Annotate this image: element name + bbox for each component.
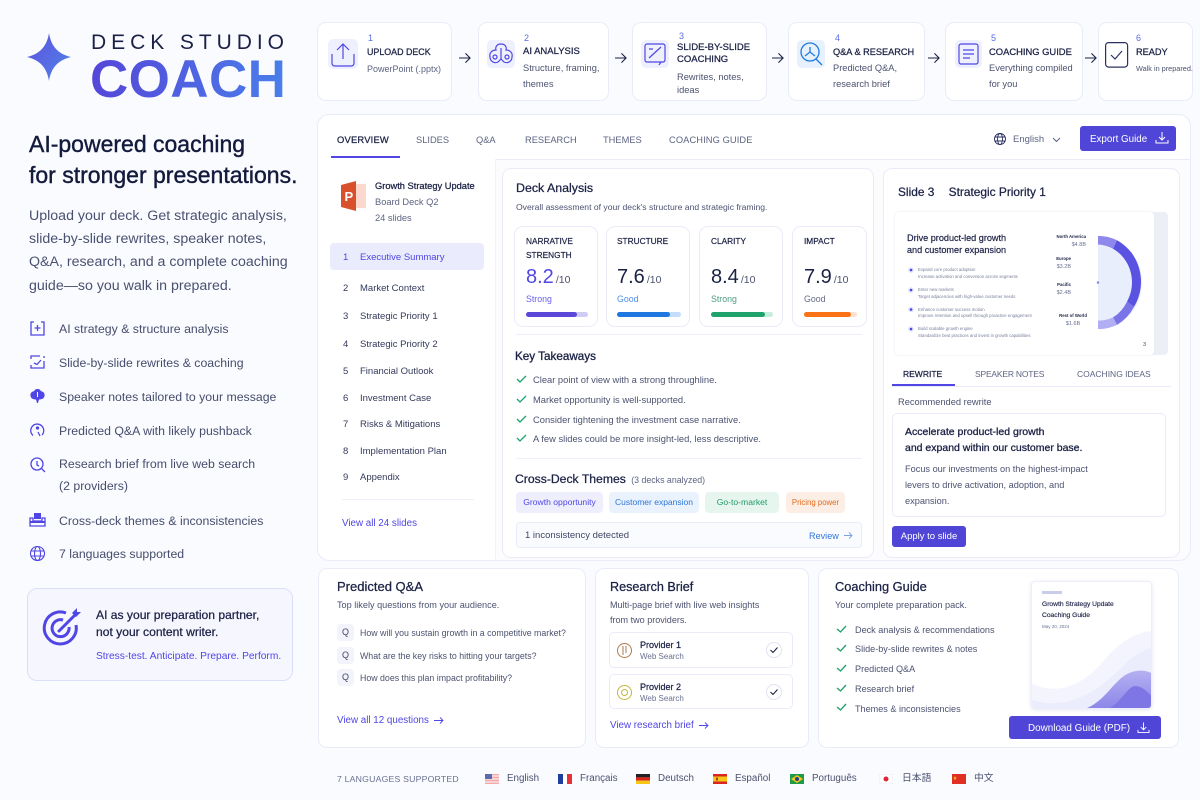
provider 1: Web Search xyxy=(640,652,684,661)
step 3: slide-by-slide coaching: COACHING xyxy=(677,54,728,65)
button: apply to slide xyxy=(892,526,966,547)
step 5: coaching guide: for you xyxy=(989,78,1017,88)
inconsistency notice xyxy=(516,522,862,548)
wordmark coach: COACH xyxy=(90,50,286,109)
slide bullets: Enhance customer success motion xyxy=(918,306,985,312)
panel: main app window xyxy=(317,114,1191,561)
tab labels: SLIDES xyxy=(416,135,449,145)
slide bullets: Enter new markets xyxy=(918,287,954,292)
language: english: English xyxy=(507,773,539,784)
metric: narrative strength: STRENGTH xyxy=(526,250,572,260)
feature list xyxy=(29,321,276,561)
takeaways list: Consider tightening the investment case narrative. xyxy=(533,415,741,425)
language: spanish xyxy=(713,771,778,789)
takeaways list: Clear point of view with a strong throughline. xyxy=(533,375,717,385)
metric: impact xyxy=(792,226,867,327)
icon: research search xyxy=(30,457,46,472)
deck meta: 24 slides xyxy=(375,212,412,222)
provider 2: Provider 2 xyxy=(640,682,681,692)
step 5: coaching guide: Everything compiled xyxy=(989,63,1073,73)
callout: preparation partner xyxy=(27,588,293,681)
chart labels: Rest of World xyxy=(1059,313,1087,318)
icon: magnifier xyxy=(797,40,825,68)
step 3: slide-by-slide coaching xyxy=(632,22,767,101)
footer: languages xyxy=(337,771,1007,789)
step 4: q&a and research: research brief xyxy=(833,78,890,88)
icon: globe xyxy=(30,546,46,561)
subheading: from two providers. xyxy=(610,615,687,625)
step 1: upload deck xyxy=(317,22,452,101)
feature text: (2 providers) xyxy=(59,479,128,493)
callout heading: AI as your preparation partner, xyxy=(96,608,259,622)
icon: speaker notes xyxy=(30,389,45,403)
tab labels: COACHING GUIDE xyxy=(669,135,753,145)
slide list: 9 xyxy=(343,472,348,483)
takeaways list xyxy=(516,375,761,444)
language: german: Deutsch xyxy=(658,773,694,784)
slide list: 8 xyxy=(343,446,348,457)
step 2: ai analysis: 2 xyxy=(524,33,529,43)
tab labels: THEMES xyxy=(603,135,642,145)
feature text: AI strategy & structure analysis xyxy=(59,322,228,336)
guide cover thumbnail: May 20, 2024 xyxy=(1042,624,1069,629)
metric: clarity: Strong xyxy=(711,294,737,304)
slide list: 2 xyxy=(343,283,348,294)
language: german xyxy=(636,771,701,789)
chart labels xyxy=(1056,234,1087,327)
heading: key takeaways: Key Takeaways xyxy=(515,350,596,363)
heading: Coaching Guide xyxy=(835,579,927,594)
slide title: Drive product-led growth xyxy=(907,233,1006,243)
checklist: Deck analysis & recommendations xyxy=(855,625,994,635)
arrow xyxy=(928,53,940,63)
step 4: q&a and research xyxy=(788,22,925,101)
metric: structure: Good xyxy=(617,294,639,304)
step 1: upload deck: 1 xyxy=(368,33,373,43)
step 5: coaching guide: COACHING GUIDE xyxy=(989,46,1072,57)
language: chinese: 中文 xyxy=(974,773,994,784)
deck meta xyxy=(375,197,439,222)
metric: structure: 7.6/10 xyxy=(617,266,661,288)
language: japanese xyxy=(879,771,934,789)
panel: slide detail xyxy=(883,168,1180,558)
chart: regional semicircle xyxy=(1096,236,1142,330)
metric: impact: IMPACT xyxy=(804,236,835,246)
link: view research brief: View research brief xyxy=(610,720,694,731)
question list: How does this plan impact profitability? xyxy=(360,673,512,683)
metric: narrative strength: Strong xyxy=(526,294,552,304)
theme chips: Growth opportunity xyxy=(523,497,596,507)
question list: How will you sustain growth in a competitive market? xyxy=(360,628,566,638)
slide list: 4 xyxy=(343,339,348,350)
checklist: Research brief xyxy=(855,684,914,694)
rewrite box: levers to drive activation, adoption, and xyxy=(905,480,1064,490)
icon: powerpoint file xyxy=(341,181,366,211)
icon: slide edit xyxy=(641,40,669,68)
language selector xyxy=(994,133,1060,145)
metric: narrative strength xyxy=(514,226,598,327)
heading: tagline: AI-powered coaching xyxy=(29,131,245,157)
tab labels: RESEARCH xyxy=(525,135,577,145)
icon: predicted q&a xyxy=(30,423,44,436)
logo: deck studio coach xyxy=(27,31,289,109)
metric: clarity: CLARITY xyxy=(711,236,746,246)
tab bar xyxy=(318,115,1190,160)
deck title: Growth Strategy Update xyxy=(375,181,475,191)
inconsistency notice: Review xyxy=(809,531,839,541)
slide bullets: Standardize best practices and invest in growth capabilities xyxy=(918,332,1030,338)
rewrite box: Accelerate product-led growth xyxy=(905,426,1044,438)
chart labels: $3.2B xyxy=(1057,264,1071,270)
theme chips xyxy=(516,492,845,513)
slide list: Risks & Mitigations xyxy=(360,419,440,430)
metric: clarity xyxy=(699,226,783,327)
heading: cross-deck themes: Cross-Deck Themes (3 decks analyzed) xyxy=(515,472,705,486)
chart labels: Pacific xyxy=(1057,282,1071,287)
step 1: upload deck: UPLOAD DECK xyxy=(367,47,431,57)
slide bullets: Build scalable growth engine xyxy=(918,326,973,331)
step 4: q&a and research: Predicted Q&A, xyxy=(833,63,897,73)
heading: Predicted Q&A xyxy=(337,579,423,594)
button: export guide: Export Guide xyxy=(1090,134,1147,145)
slide bullets: Target adjacencies with high-value customer needs xyxy=(918,294,1015,298)
subheading xyxy=(610,598,759,628)
text block: intro xyxy=(29,208,288,294)
language: english xyxy=(485,771,545,789)
takeaways list: A few slides could be more insight-led, less descriptive. xyxy=(533,434,761,444)
step 3: slide-by-slide coaching: Rewrites, notes, xyxy=(677,72,744,82)
metric: impact: 7.9/10 xyxy=(804,266,848,288)
question list: What are the key risks to hitting your targets? xyxy=(360,651,537,661)
panel: coaching guide xyxy=(818,568,1179,748)
language: spanish: Español xyxy=(735,773,770,784)
icon: sparkle star xyxy=(27,33,71,81)
language: portuguese: Português xyxy=(812,773,857,784)
guide cover thumbnail xyxy=(1031,581,1152,709)
subheading: Multi-page brief with live web insights xyxy=(610,600,759,610)
step 4: q&a and research: 4 xyxy=(835,33,840,43)
metric: structure: STRUCTURE xyxy=(617,236,668,246)
step 5: coaching guide xyxy=(945,22,1083,101)
slide title: and customer expansion xyxy=(907,245,1006,255)
step 6: ready: 6 xyxy=(1136,33,1141,43)
slide list: Market Context xyxy=(360,283,424,294)
step 2: ai analysis: AI ANALYSIS xyxy=(523,46,580,57)
selected item: Executive Summary xyxy=(360,252,444,263)
metric: narrative strength: NARRATIVE xyxy=(526,236,573,246)
language: chinese xyxy=(952,771,1002,789)
text block: intro: guide—so you walk in prepared. xyxy=(29,278,232,294)
metric: impact: Good xyxy=(804,294,826,304)
icon: document xyxy=(955,40,982,68)
step 4: q&a and research: Q&A & RESEARCH xyxy=(833,47,914,57)
takeaways list: Market opportunity is well-supported. xyxy=(533,395,686,405)
theme chips: Pricing power xyxy=(792,498,839,507)
tab labels: Q&A xyxy=(476,135,496,145)
feature text xyxy=(59,457,255,493)
feature text: Slide-by-slide rewrites & coaching xyxy=(59,356,244,370)
heading: Research Brief xyxy=(610,580,693,594)
theme chips: Customer expansion xyxy=(615,497,693,507)
icon: target xyxy=(42,608,81,646)
rewrite box: Focus our investments on the highest-impact xyxy=(905,464,1088,474)
chart labels: $4.8B xyxy=(1072,242,1086,248)
detail tabs xyxy=(892,364,1171,387)
text block: intro: Upload your deck. Get strategic analysis, xyxy=(29,208,287,224)
language: portuguese xyxy=(790,771,860,789)
language: japanese: 日本語 xyxy=(902,773,931,784)
step 3: slide-by-slide coaching: SLIDE-BY-SLIDE xyxy=(677,42,750,53)
icon: brain xyxy=(487,40,515,68)
button: export guide xyxy=(1080,126,1176,151)
icon: rewrites xyxy=(30,355,45,369)
language: french xyxy=(558,771,623,789)
step 1: upload deck: PowerPoint (.pptx) xyxy=(367,64,441,74)
panel: predicted q&a xyxy=(318,568,586,748)
footer label: 7 LANGUAGES SUPPORTED xyxy=(337,774,459,784)
step 6: ready: READY xyxy=(1136,47,1168,57)
slide title xyxy=(907,233,1006,256)
inconsistency notice: 1 inconsistency detected xyxy=(525,530,629,541)
arrow xyxy=(434,717,444,724)
subheading: Your complete preparation pack. xyxy=(835,600,967,610)
link: view all slides: View all 24 slides xyxy=(342,518,417,529)
checklist: Slide-by-slide rewrites & notes xyxy=(855,644,977,654)
callout heading: not your content writer. xyxy=(96,625,218,639)
checklist: Themes & inconsistencies xyxy=(855,704,961,714)
chart labels: $1.6B xyxy=(1066,321,1080,327)
slide list: Appendix xyxy=(360,472,400,483)
heading: Slide 3 Strategic Priority 1 xyxy=(898,185,1046,199)
slide list xyxy=(343,283,447,483)
sidebar: slide navigator xyxy=(318,159,496,560)
provider 2 xyxy=(609,674,793,709)
selected item: 1 xyxy=(343,252,348,263)
process flow xyxy=(317,22,1193,101)
feature text: Speaker notes tailored to your message xyxy=(59,390,276,404)
metric: narrative strength: 8.2/10 xyxy=(526,266,570,288)
step 2: ai analysis: Structure, framing, xyxy=(523,63,599,73)
detail tabs: SPEAKER NOTES xyxy=(975,369,1044,379)
slide number: 3 xyxy=(1143,342,1146,348)
metric: structure xyxy=(606,226,690,327)
subheading: Top likely questions from your audience. xyxy=(337,600,499,610)
step 2: ai analysis xyxy=(478,22,609,101)
step 6: ready: Walk in prepared. xyxy=(1136,64,1193,73)
deck meta: Board Deck Q2 xyxy=(375,197,439,207)
question list: Q xyxy=(342,650,349,660)
tab labels xyxy=(416,135,753,145)
slide list: Strategic Priority 2 xyxy=(360,339,438,350)
step 3: slide-by-slide coaching: ideas xyxy=(677,84,699,94)
heading: tagline xyxy=(28,131,297,188)
heading: Deck Analysis xyxy=(516,181,593,195)
slide list: Financial Outlook xyxy=(360,366,433,377)
feature text: Cross-deck themes & inconsistencies xyxy=(59,514,263,528)
panel: deck analysis xyxy=(502,168,874,558)
button: apply to slide: Apply to slide xyxy=(901,531,957,542)
slide thumbnail xyxy=(895,212,1168,355)
slide bullets xyxy=(908,267,1032,338)
provider 1: Provider 1 xyxy=(640,640,681,650)
checklist: Predicted Q&A xyxy=(855,664,915,674)
rewrite box: expansion. xyxy=(905,496,949,506)
text block: intro: Q&A, research, and a complete coaching xyxy=(29,254,288,270)
icon: strategy xyxy=(30,321,45,336)
arrow xyxy=(699,722,709,729)
checklist xyxy=(836,622,1016,722)
slide bullets: Expand core product adoption xyxy=(918,267,975,272)
step 6: ready xyxy=(1098,22,1193,101)
button: download guide xyxy=(1009,716,1161,739)
icon: themes xyxy=(29,513,46,527)
rewrite box: and expand within our customer base. xyxy=(905,442,1082,454)
slide list: 6 xyxy=(343,393,348,404)
language: french: Français xyxy=(580,773,618,784)
link: view all questions: View all 12 questions xyxy=(337,715,429,726)
step 2: ai analysis: themes xyxy=(523,78,554,88)
callout heading xyxy=(96,608,259,639)
arrow xyxy=(615,53,627,63)
active tab: OVERVIEW xyxy=(337,134,389,145)
icon: powerpoint file: P xyxy=(344,189,354,204)
button: download guide: Download Guide (PDF) xyxy=(1028,722,1130,734)
detail tabs: COACHING IDEAS xyxy=(1077,369,1151,379)
wordmark top: DECK STUDIO xyxy=(91,31,289,54)
label: Recommended rewrite xyxy=(898,397,992,407)
heading: tagline: for stronger presentations. xyxy=(29,162,297,188)
icon: upload xyxy=(328,39,358,69)
theme chips: Go-to-market xyxy=(717,497,767,507)
icon: checkbox xyxy=(1105,42,1128,68)
slide list: 3 xyxy=(343,311,348,322)
chart labels: North America xyxy=(1057,234,1086,238)
arrow xyxy=(772,53,784,63)
feature text: Predicted Q&A with likely pushback xyxy=(59,424,252,438)
slide list: 5 xyxy=(343,366,348,377)
panel: research brief xyxy=(595,568,809,748)
text block: intro: slide-by-slide rewrites, speaker notes, xyxy=(29,231,266,247)
guide cover thumbnail: Coaching Guide xyxy=(1042,612,1090,618)
question list: Q xyxy=(342,627,349,637)
arrow xyxy=(1085,53,1097,63)
feature text: Research brief from live web search xyxy=(59,457,255,471)
active tab underline xyxy=(331,156,400,158)
slide bullets: Increase activation and conversion across segments xyxy=(918,274,1018,278)
slide bullets: Improve retention and upsell through proactive engagement xyxy=(918,313,1032,318)
step 3: slide-by-slide coaching: 3 xyxy=(679,31,684,41)
chart labels: $2.4B xyxy=(1057,290,1071,296)
question list xyxy=(337,623,577,693)
provider 1 xyxy=(609,632,793,668)
provider 2: Web Search xyxy=(640,694,684,703)
language selector: English xyxy=(1013,134,1044,145)
slide list: Implementation Plan xyxy=(360,446,447,457)
question list: Q xyxy=(342,672,349,682)
metric: clarity: 8.4/10 xyxy=(711,266,755,288)
step 5: coaching guide: 5 xyxy=(991,33,996,43)
selected item xyxy=(330,243,484,270)
rewrite box xyxy=(892,413,1166,517)
guide cover thumbnail: Growth Strategy Update xyxy=(1042,601,1114,608)
arrow xyxy=(459,53,471,63)
callout subline: Stress-test. Anticipate. Prepare. Perform. xyxy=(96,651,281,662)
slide list: 7 xyxy=(343,419,348,430)
feature text: 7 languages supported xyxy=(59,547,184,561)
chart labels: Europe xyxy=(1056,256,1071,261)
slide list: Strategic Priority 1 xyxy=(360,311,438,322)
slide list: Investment Case xyxy=(360,393,431,404)
detail tabs: REWRITE xyxy=(903,369,942,379)
subheading: Overall assessment of your deck's structure and strategic framing. xyxy=(516,202,767,212)
